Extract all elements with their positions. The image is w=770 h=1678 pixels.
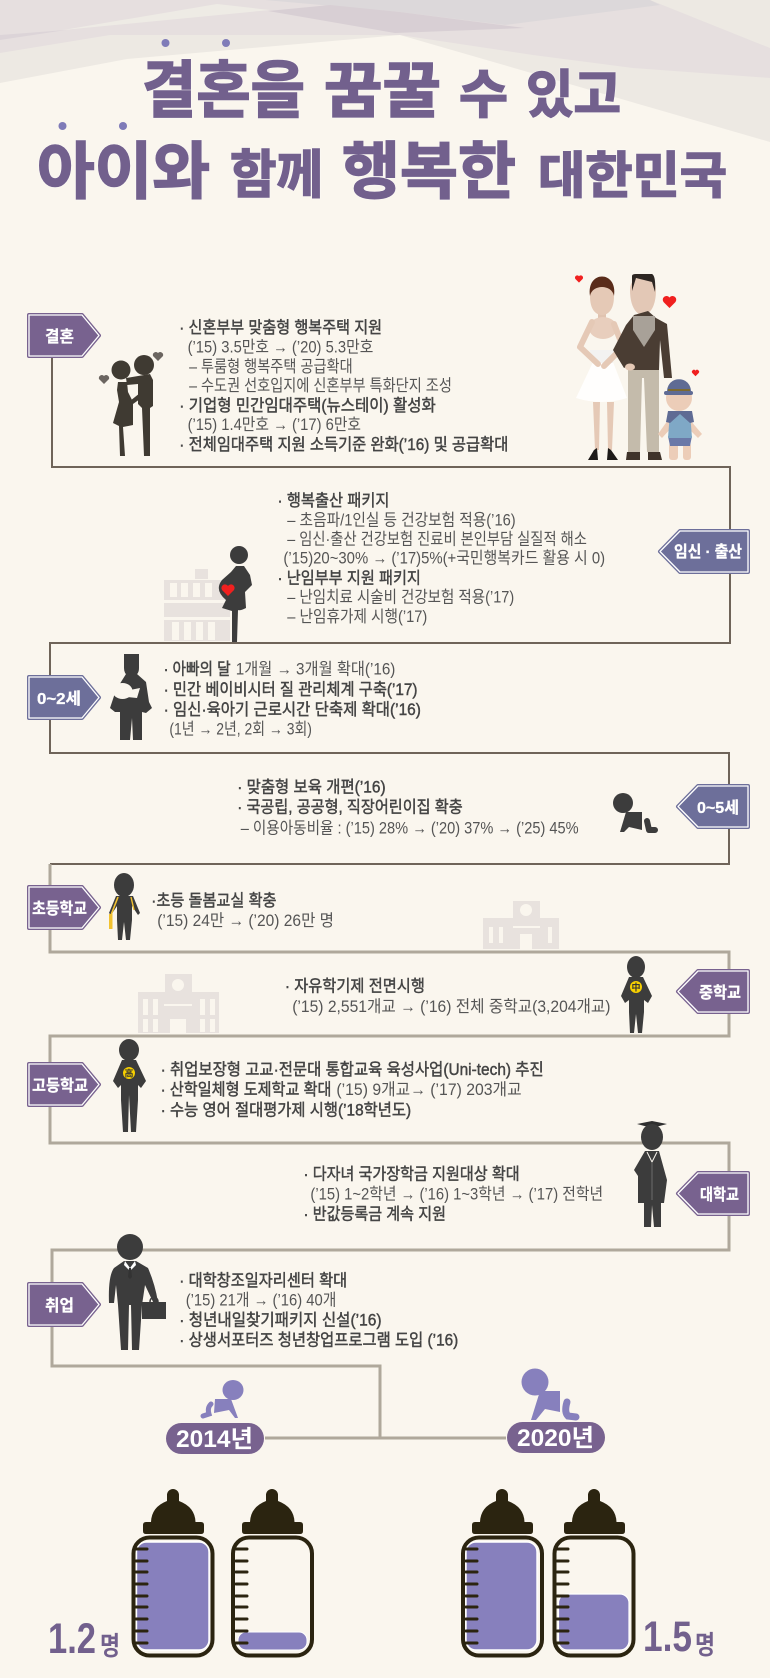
text: free semester: [285, 977, 610, 1016]
bottle: half filled: [554, 1489, 634, 1656]
year pill: 2020년: [507, 1422, 605, 1453]
title line 1: 수: [459, 67, 508, 125]
panel: high school: [29, 1039, 544, 1132]
text: vocational policies: · 산학일체형 도제학교 확대: [161, 1080, 332, 1099]
value: 1.5명: 명: [695, 1630, 715, 1660]
text: birth policies: – 초음파/1인실 등 건강보험 적용(’16): [287, 510, 516, 529]
icon: father holding baby: [110, 654, 152, 740]
text: job policies: (’15) 21개 → (’16) 40개: [186, 1290, 336, 1309]
text: birth policies: – 난임치료 시술비 건강보험 적용(’17): [287, 588, 514, 607]
text: scholarship policies: · 다자녀 국가장학금 지원대상 확대: [304, 1164, 520, 1183]
bottle: full: [463, 1489, 542, 1656]
text: parental leave policies: · 민간 베이비시터 질 관리체계 구축(’17): [164, 680, 418, 699]
year pill: 2020년: 2020년: [517, 1425, 594, 1452]
text: parental leave policies: (1년 → 2년, 2회 → 3회): [169, 719, 312, 738]
panel: age 0-5: [237, 778, 748, 837]
text: housing policies: (’15) 3.5만호 → (’20) 5.3만호: [188, 338, 373, 357]
text: housing policies: (’15) 1.4만호 → (’17) 6만호: [188, 415, 361, 434]
tag: 결혼: [29, 315, 99, 356]
text: vocational policies: · 수능 영어 절대평가제 시행(’18학년도): [161, 1100, 411, 1119]
panel: 2020 birth rate: [463, 1368, 715, 1661]
tag: 취업: 취업: [45, 1297, 74, 1315]
tag: 0~5세: [678, 786, 748, 827]
text: vocational policies: · 취업보장형 고교·전문대 통합교육 육성사업(Uni-tech) 추진: [161, 1060, 544, 1079]
text: after-school care: (’15) 24만 → (’20) 26만 명: [157, 911, 334, 930]
emphasis dots: [58, 39, 230, 130]
value: 1.5명: 1.5: [643, 1613, 692, 1661]
panel: age 0-2: [29, 654, 421, 740]
tag: 0~2세: 0~2세: [37, 690, 81, 708]
text: scholarship policies: (’15) 1~2학년 → (’16) 1~3학년 → (’17) 전학년: [310, 1184, 603, 1203]
title line 2: 대한민국: [538, 148, 727, 204]
text: free semester: · 자유학기제 전면시행: [285, 977, 425, 996]
text: housing policies: · 신혼부부 맞춤형 행복주택 지원: [179, 318, 382, 337]
text: parental leave policies: · 임신·육아기 근로시간 단축제 확대(’16): [164, 700, 421, 719]
tag: 임신·출산: [660, 531, 748, 572]
year pill: 2014년: 2014년: [176, 1426, 253, 1453]
bottle: fifth filled: [233, 1489, 312, 1656]
title: [37, 39, 727, 207]
bride: [576, 276, 627, 460]
text: childcare policies: – 이용아동비율 : (’15) 28% → (’20) 37% → (’25) 45%: [241, 818, 579, 837]
boy: [658, 379, 702, 460]
tag: 중학교: 중학교: [699, 984, 741, 1002]
text: job policies: · 청년내일찾기패키지 신설(’16): [179, 1310, 382, 1329]
text: job policies: · 상생서포터즈 청년창업프로그램 도입 (’16): [179, 1330, 458, 1349]
text: free semester: (’15) 2,551개교 → (’16) 전체 중학교(3,204개교): [292, 997, 610, 1016]
icon: family: [575, 274, 702, 460]
tag: 고등학교: [29, 1064, 99, 1105]
tag: 초등학교: [29, 887, 99, 928]
title line 2: 행복한: [342, 138, 516, 207]
icon: baby 2014: [203, 1380, 244, 1418]
text: housing policies: [179, 318, 508, 454]
text: vocational policies: [161, 1060, 544, 1119]
timeline connector: [50, 358, 730, 1438]
title line 2: 아이와: [37, 138, 210, 207]
panel: middle school: [138, 956, 748, 1033]
text: vocational policies: (’15) 9개교→ (’17) 203개교: [336, 1080, 522, 1099]
panel: employment: [29, 1234, 458, 1350]
icon: crawling baby: [613, 793, 655, 832]
title line 1: 결혼을: [142, 57, 305, 126]
icon: graduate: [634, 1121, 667, 1227]
tag: 0~2세: [29, 677, 99, 718]
text: birth policies: (’15)20~30% → (’17)5%(+국민행복카드 활용 시 0): [283, 549, 605, 568]
title line 1: [142, 57, 621, 126]
value: 1.2명: 명: [100, 1631, 120, 1661]
tag: 임신·출산: 임신 · 출산: [674, 543, 742, 561]
text: job policies: [179, 1271, 458, 1349]
icon: baby 2020: [522, 1368, 576, 1420]
title line 1: 꿈꿀: [324, 58, 441, 125]
text: housing policies: – 투룸형 행복주택 공급확대: [189, 357, 353, 376]
text: parental leave policies: 1개월 → 3개월 확대(’16): [236, 659, 395, 678]
year pill: 2014년: [166, 1423, 264, 1454]
icon: schoolchild: [109, 873, 140, 940]
value: 1.2명: 1.2: [48, 1615, 96, 1663]
text: parental leave policies: [164, 659, 421, 738]
text: housing policies: · 전체임대주택 지원 소득기준 완화(’16) 및 공급확대: [179, 435, 508, 454]
panel: elementary school: [29, 873, 559, 949]
text: job policies: · 대학창조일자리센터 확대: [179, 1271, 347, 1290]
tag: 초등학교: 초등학교: [32, 900, 87, 918]
icon: pregnant woman: [219, 546, 252, 642]
text: scholarship policies: · 반값등록금 계속 지원: [304, 1204, 446, 1223]
icon: businessman: [109, 1234, 166, 1350]
text: birth policies: [278, 491, 605, 626]
text: birth policies: – 임신·출산 건강보험 진료비 본인부담 실질적 해소: [287, 529, 587, 548]
icon: high schooler: [113, 1039, 146, 1132]
bottle: full: [134, 1489, 212, 1656]
icon: high schooler: 高: [124, 1068, 134, 1078]
text: childcare policies: · 맞춤형 보육 개편(’16): [237, 778, 386, 797]
title line 1: 있고: [526, 67, 621, 125]
icon: middle schooler: 中: [631, 982, 641, 992]
text: after-school care: ·초등 돌봄교실 확충: [151, 891, 276, 910]
tag: 고등학교: 고등학교: [32, 1077, 88, 1095]
tag: 0~5세: 0~5세: [697, 799, 739, 817]
tag: 대학교: [678, 1173, 748, 1214]
icon: middle schooler: [621, 956, 652, 1033]
text: parental leave policies: · 아빠의 달: [164, 659, 231, 678]
icon: school building: [483, 901, 559, 949]
tag: 대학교: 대학교: [700, 1186, 739, 1204]
text: birth policies: · 난임부부 지원 패키지: [278, 568, 421, 587]
text: housing policies: – 수도권 선호입지에 신혼부부 특화단지 조성: [189, 376, 452, 395]
title line 2: 함께: [230, 147, 323, 205]
tag: 결혼: 결혼: [45, 328, 74, 346]
icon: hospital: [164, 569, 230, 641]
panel: 2014 birth rate: [48, 1380, 312, 1663]
icon: hugging couple: [99, 352, 163, 456]
text: housing policies: · 기업형 민간임대주택(뉴스테이) 활성화: [179, 396, 436, 415]
icon: school building: [138, 974, 219, 1033]
text: after-school care: [151, 891, 334, 930]
text: childcare policies: · 국공립, 공공형, 직장어린이집 확충: [237, 798, 463, 817]
text: birth policies: · 행복출산 패키지: [278, 491, 390, 510]
panel: pregnancy: [164, 491, 748, 642]
tag: 중학교: [678, 971, 748, 1012]
text: scholarship policies: [304, 1164, 603, 1223]
panel: university: [304, 1121, 748, 1227]
text: childcare policies: [237, 778, 579, 837]
text: birth policies: – 난임휴가제 시행(’17): [287, 607, 427, 626]
tag: 취업: [29, 1284, 99, 1325]
title line 2: [37, 138, 727, 207]
groom: [613, 274, 672, 460]
panel: marriage: [29, 274, 702, 460]
